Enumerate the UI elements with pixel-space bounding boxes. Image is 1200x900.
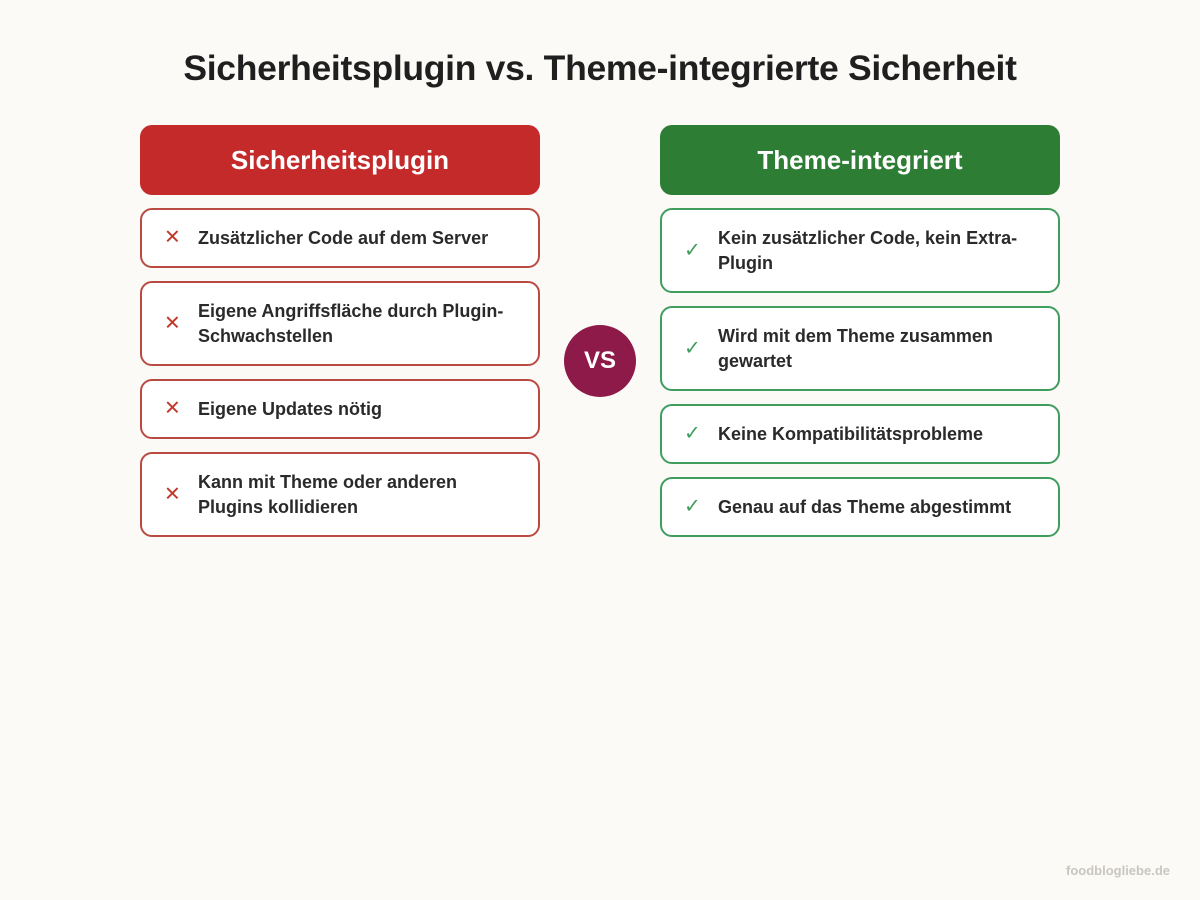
item: Kompatibilität: [660, 404, 1060, 464]
item: Kompatibilität: Keine Kompatibilitätsprobleme: [718, 424, 983, 444]
vs badge: VS: [584, 347, 616, 374]
item: Updates: [140, 379, 540, 439]
heading: Sicherheitsplugin: [140, 125, 540, 195]
item: kollidieren: [140, 452, 540, 537]
item: Kompatibilität: ✓: [684, 422, 701, 444]
heading: Theme-integriert: [660, 125, 1060, 195]
item: kollidieren: Kann mit Theme oder anderen Plugins kollidieren: [198, 472, 457, 517]
item: kein zusätzlicher Code: ✓: [684, 239, 701, 261]
item: abgestimmt: [660, 477, 1060, 537]
item: Angriffsfläche: ✕: [164, 312, 181, 334]
footer credit: foodblogliebe.de: [1066, 863, 1170, 878]
item: kollidieren: ✕: [164, 483, 181, 505]
item: Angriffsfläche: [140, 281, 540, 366]
item: Updates: Eigene Updates nötig: [198, 399, 382, 419]
item: abgestimmt: Genau auf das Theme abgestimmt: [718, 497, 1011, 517]
item: Updates: ✕: [164, 398, 181, 420]
item: gewartet: [660, 306, 1060, 391]
item: zusätzlicher Code: [140, 208, 540, 268]
heading: Sicherheitsplugin: Sicherheitsplugin: [231, 145, 449, 175]
item: kein zusätzlicher Code: [660, 208, 1060, 293]
item: kein zusätzlicher Code: Kein zusätzlicher Code, kein Extra-Plugin: [718, 228, 1017, 273]
item: gewartet: Wird mit dem Theme zusammen gewartet: [718, 326, 993, 371]
title: Sicherheitsplugin vs. Theme-integrierte Sicherheit: [183, 48, 1017, 88]
item: gewartet: ✓: [684, 337, 701, 359]
vs badge: [564, 325, 636, 397]
panel: Sicherheitsplugin: [140, 125, 540, 537]
item: abgestimmt: ✓: [684, 496, 701, 518]
item: Angriffsfläche: Eigene Angriffsfläche durch Plugin-Schwachstellen: [198, 301, 503, 346]
item: zusätzlicher Code: ✕: [164, 226, 181, 248]
item: zusätzlicher Code: Zusätzlicher Code auf dem Server: [198, 228, 488, 248]
heading: Theme-integriert: Theme-integriert: [757, 145, 963, 175]
panel: Theme-integriert: [660, 125, 1060, 537]
